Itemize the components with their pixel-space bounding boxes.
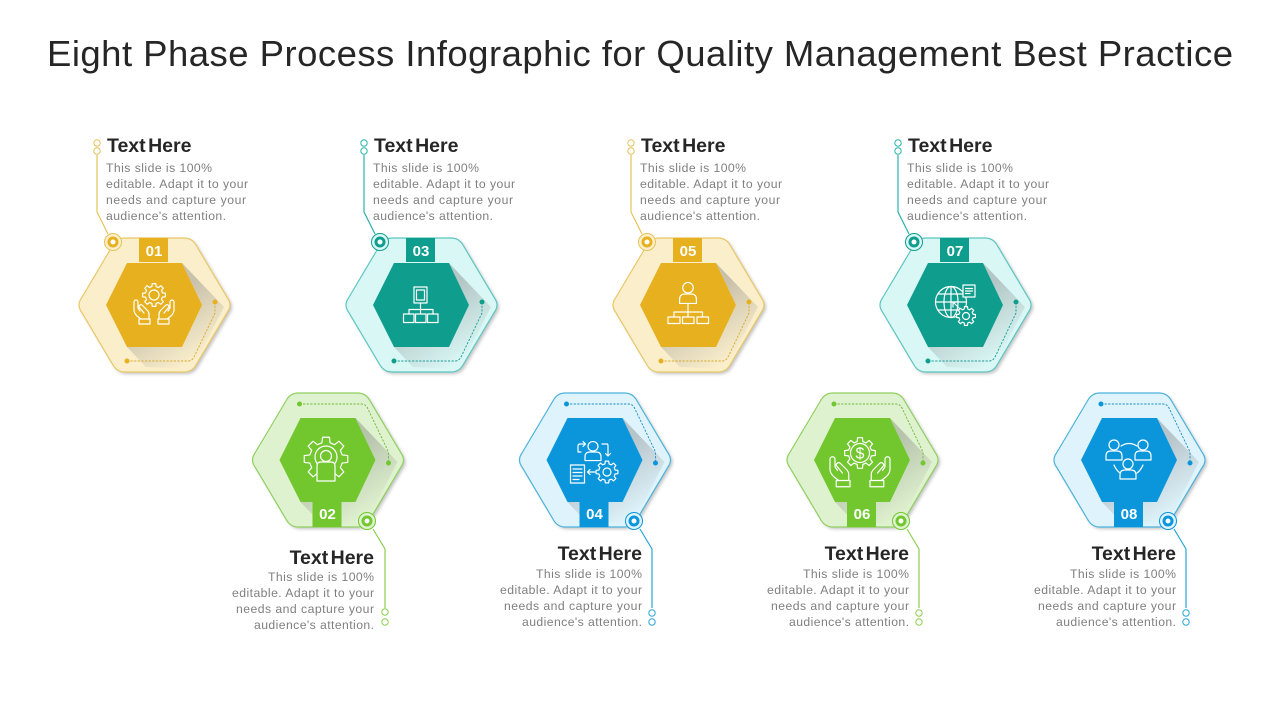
icon: hands holding dollar gear: $ — [856, 446, 865, 462]
text block 08: This slide is 100% — [1070, 567, 1176, 581]
panel: phase 07 — [880, 135, 1049, 374]
icon: three connected people — [1106, 440, 1151, 479]
hexagon 05 — [613, 238, 766, 374]
icon: person, document and gear cycle — [570, 442, 618, 483]
hexagon 02: 02 — [319, 506, 336, 523]
hexagon 06 — [787, 393, 940, 529]
text block 05: editable. Adapt it to your — [640, 177, 782, 191]
text block 03: This slide is 100% — [373, 161, 479, 175]
text block 05: This slide is 100% — [640, 161, 746, 175]
hexagon 04: 04 — [586, 506, 603, 523]
leader line 04 — [626, 512, 655, 625]
icon: manager hierarchy — [668, 282, 708, 324]
text block 02: This slide is 100% — [268, 570, 374, 584]
text block 02: needs and capture your — [236, 602, 374, 616]
text block 04: Text Here — [558, 543, 642, 565]
text block 07: audience's attention. — [907, 209, 1027, 223]
text block 06: Text Here — [825, 543, 909, 565]
text block 02: Text Here — [290, 547, 374, 569]
panel: phase 01 — [79, 135, 248, 374]
text block 06: editable. Adapt it to your — [767, 583, 909, 597]
icon: gear with person — [304, 437, 348, 481]
text block 06: audience's attention. — [789, 615, 909, 629]
text block 06: needs and capture your — [771, 599, 909, 613]
hexagon 08 — [1054, 393, 1207, 529]
text block 07: Text Here — [908, 135, 993, 157]
leader line 01 — [94, 140, 122, 250]
text block 04: audience's attention. — [522, 615, 642, 629]
icon: globe with document and gear — [936, 285, 975, 325]
text block 01: Text Here — [107, 135, 192, 157]
text block 05: Text Here — [641, 135, 726, 157]
text block 04: needs and capture your — [504, 599, 642, 613]
text block 07: needs and capture your — [907, 193, 1047, 207]
hexagon 03: 03 — [413, 243, 429, 260]
panel: phase 06 — [767, 393, 940, 629]
hexagon 05: 05 — [680, 243, 696, 260]
title: Eight Phase Process Infographic for Quality Management Best Practice — [47, 33, 1233, 74]
hexagon 03 — [346, 238, 499, 374]
text block 07 — [907, 135, 1049, 223]
icon: hands holding dollar gear — [830, 438, 890, 487]
text block 01 — [106, 135, 248, 223]
leader line 08 — [1160, 512, 1189, 625]
panel: phase 03 — [346, 135, 515, 374]
hexagon 06: 06 — [854, 506, 870, 523]
icon: hands holding gear — [134, 284, 174, 324]
leader line 06 — [892, 512, 922, 625]
text block 01: editable. Adapt it to your — [106, 177, 248, 191]
hexagon 01 — [79, 238, 232, 374]
text block 07: This slide is 100% — [907, 161, 1013, 175]
text block 07: editable. Adapt it to your — [907, 177, 1049, 191]
text block 01: needs and capture your — [106, 193, 246, 207]
panel: phase 05 — [613, 135, 782, 374]
text block 02 — [232, 547, 374, 632]
text block 02: audience's attention. — [254, 618, 374, 632]
text block 03 — [373, 135, 515, 223]
hexagon 01: 01 — [146, 243, 162, 260]
panel: phase 08 — [1034, 393, 1207, 629]
text block 05 — [640, 135, 782, 223]
text block 03: editable. Adapt it to your — [373, 177, 515, 191]
icon: org structure — [404, 287, 438, 322]
text block 05: needs and capture your — [640, 193, 780, 207]
hexagon 07: 07 — [947, 243, 963, 260]
leader line 03 — [361, 140, 388, 250]
text block 08: audience's attention. — [1056, 615, 1176, 629]
text block 01: audience's attention. — [106, 209, 226, 223]
hexagon 02 — [252, 393, 406, 529]
hexagon 07 — [880, 238, 1033, 374]
text block 04: This slide is 100% — [536, 567, 642, 581]
text block 03: needs and capture your — [373, 193, 513, 207]
hexagon 04 — [520, 393, 672, 529]
text block 06 — [767, 543, 909, 629]
leader line 02 — [358, 512, 388, 625]
text block 03: audience's attention. — [373, 209, 493, 223]
leader line 05 — [628, 140, 656, 250]
panel: phase 04 — [500, 393, 672, 629]
panel: phase 02 — [232, 393, 406, 632]
text block 05: audience's attention. — [640, 209, 760, 223]
hexagon 08: 08 — [1121, 506, 1137, 523]
text block 02: editable. Adapt it to your — [232, 586, 374, 600]
text block 04 — [500, 543, 642, 629]
text block 08: Text Here — [1092, 543, 1176, 565]
leader line 07 — [895, 140, 922, 250]
text block 08 — [1034, 543, 1176, 629]
text block 08: editable. Adapt it to your — [1034, 583, 1176, 597]
text block 01: This slide is 100% — [106, 161, 212, 175]
text block 06: This slide is 100% — [803, 567, 909, 581]
text block 03: Text Here — [374, 135, 459, 157]
text block 08: needs and capture your — [1038, 599, 1176, 613]
text block 04: editable. Adapt it to your — [500, 583, 642, 597]
